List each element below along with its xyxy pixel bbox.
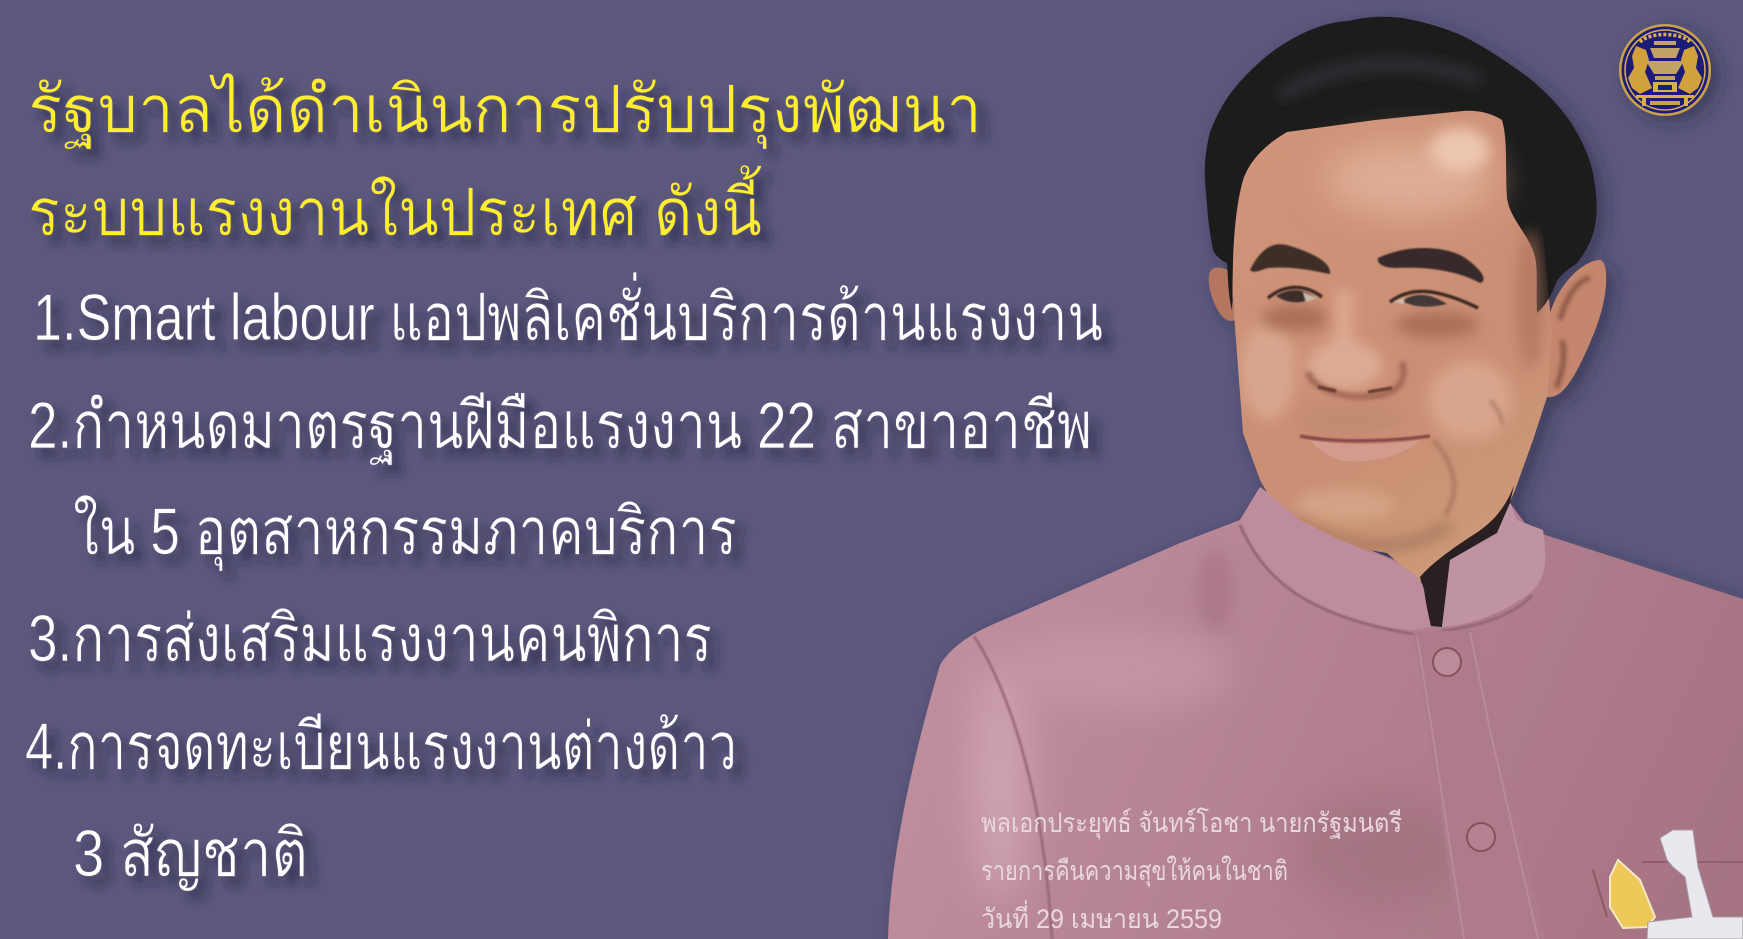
neck opening — [1420, 485, 1514, 627]
nose — [1307, 290, 1404, 397]
face shading — [1240, 128, 1544, 546]
right ear — [1547, 260, 1606, 397]
seal: base motif — [1650, 101, 1680, 105]
lower button — [1467, 823, 1495, 851]
nose tip — [1307, 341, 1383, 389]
caption: date: วันที่ 29 เมษายน 2559 — [981, 900, 1222, 934]
item 4 continued: 3 สัญชาติ — [73, 816, 308, 891]
placket — [1413, 630, 1545, 939]
right collar — [1442, 503, 1545, 627]
heading — [28, 72, 982, 249]
collar seam shadow — [1240, 525, 1532, 634]
white pocket emblem — [1647, 830, 1743, 939]
mouth — [1300, 436, 1430, 461]
seal: flames — [1640, 34, 1690, 42]
seal: right lion — [1678, 46, 1702, 94]
hair — [1205, 17, 1597, 313]
nostril shade — [1308, 362, 1404, 397]
ear inner shading — [1556, 278, 1590, 388]
seal disc — [1619, 24, 1711, 116]
caption: name: พลเอกประยุทธ์ จันทร์โอชา นายกรัฐมนตรี — [981, 807, 1402, 840]
left eye — [1268, 287, 1322, 302]
left eyebrow — [1250, 244, 1330, 274]
government seal — [1619, 24, 1711, 116]
heading: ระบบแรงงานในประเทศ ดังนี้ — [28, 165, 763, 249]
hair sheen — [1280, 64, 1480, 95]
placket stitching — [1417, 632, 1538, 939]
jacket shading — [970, 550, 1470, 939]
item 4: 4.การจดทะเบียนแรงงานต่างด้าว — [25, 709, 737, 783]
nose bridge highlight — [1343, 290, 1345, 365]
pocket stitch — [1593, 870, 1607, 917]
face — [1225, 100, 1552, 590]
right eye — [1390, 291, 1478, 308]
jacket — [888, 487, 1743, 939]
item 2: 2.กำหนดมาตรฐานฝีมือแรงงาน 22 สาขาอาชีพ — [28, 388, 1092, 465]
top button — [1433, 648, 1461, 676]
silhouette with soft shadow — [888, 17, 1743, 939]
lower lip — [1310, 440, 1420, 461]
seal: pedestal — [1636, 82, 1694, 106]
seal: left lion — [1628, 46, 1652, 94]
lip line — [1300, 436, 1430, 441]
item 3: 3.การส่งเสริมแรงงานคนพิการ — [28, 601, 712, 675]
nostrils — [1318, 387, 1392, 392]
list of labour measures — [25, 272, 1103, 891]
gold shield pin — [1610, 860, 1655, 928]
pocket line — [1642, 861, 1743, 863]
left ear — [1209, 268, 1235, 321]
caption — [981, 807, 1402, 934]
item 1: 1.Smart labour แอปพลิเคชั่นบริการด้านแรงงาน — [33, 272, 1103, 354]
portrait photo — [888, 17, 1743, 939]
heading: รัฐบาลได้ดำเนินการปรับปรุงพัฒนา — [28, 72, 982, 150]
item 2 continued: ใน 5 อุตสาหกรรมภาคบริการ — [73, 494, 737, 572]
left collar — [1240, 487, 1430, 630]
right eyebrow — [1378, 248, 1484, 283]
caption: programme: รายการคืนความสุขให้คนในชาติ — [981, 855, 1288, 888]
seal: urn — [1646, 41, 1684, 80]
